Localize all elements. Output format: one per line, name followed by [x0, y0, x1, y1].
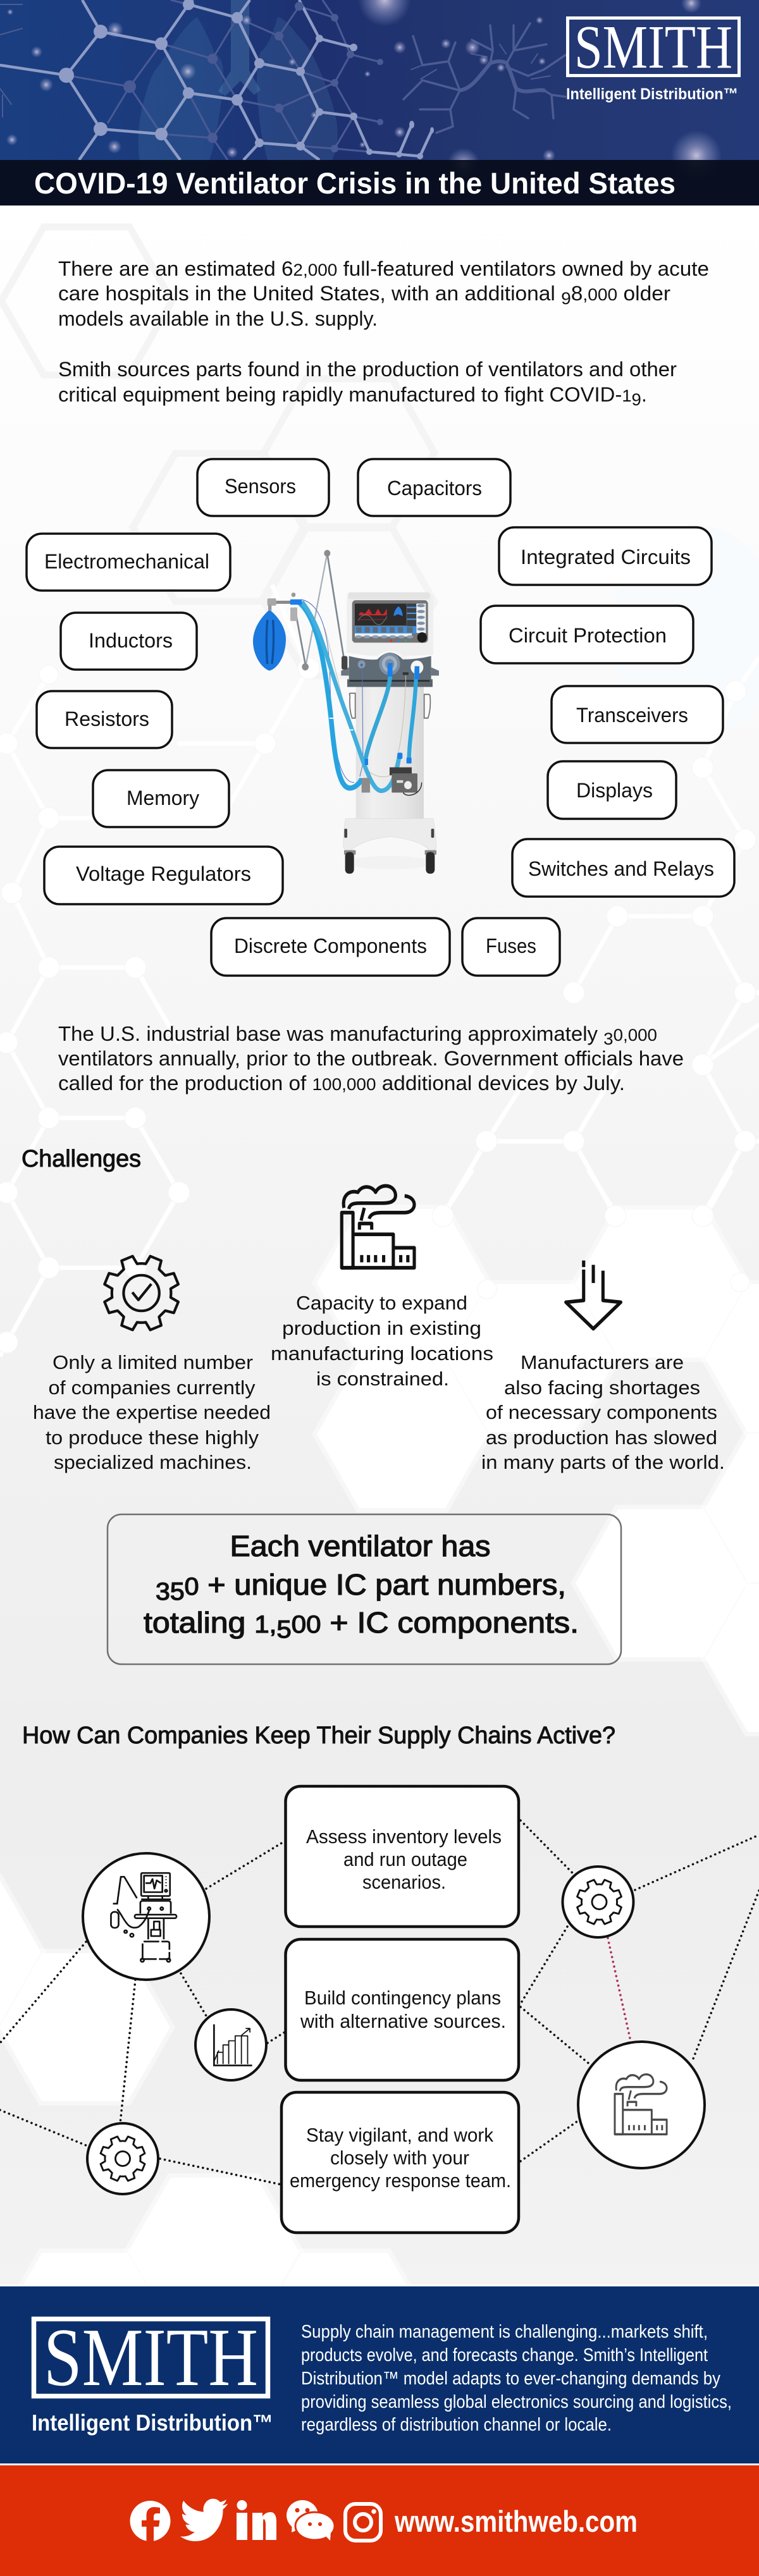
circle: chart icon	[195, 2009, 266, 2080]
footer logo: SMITH	[44, 2312, 258, 2403]
footer description	[301, 2322, 732, 2435]
label: Integrated Circuits	[499, 527, 712, 585]
hero neuron branch	[0, 4, 565, 133]
challenge 2	[271, 1186, 493, 1390]
heading: Challenges: Challenges	[22, 1146, 141, 1172]
label: Voltage Regulators: Voltage Regulators	[76, 862, 251, 885]
step: vigilance: closely with your	[330, 2147, 469, 2169]
title bar	[0, 160, 759, 205]
label: Inductors: Inductors	[89, 629, 173, 652]
white node network	[0, 585, 759, 1356]
callout: IC counts	[108, 1514, 621, 1664]
label: Fuses	[462, 918, 560, 976]
label: Inductors	[61, 613, 197, 670]
label: Memory: Memory	[126, 787, 199, 809]
icon: factory	[342, 1186, 414, 1268]
label: Resistors	[37, 691, 172, 748]
intro text: ,000 older	[583, 282, 668, 305]
footer: social band	[0, 2465, 759, 2576]
port panel	[349, 653, 431, 680]
callout: IC counts: + IC components.	[329, 1606, 558, 1639]
title: COVID-19 Ventilator Crisis in the United States	[34, 166, 676, 200]
icon: facebook	[130, 2501, 171, 2541]
challenge 1: specialized machines.	[54, 1451, 252, 1473]
production text: 3	[603, 1029, 614, 1048]
intro text: 8	[571, 282, 583, 305]
circle: factory icon	[578, 2042, 705, 2168]
callout: IC counts: + unique IC part numbers,	[207, 1568, 544, 1601]
humidifier	[390, 768, 412, 775]
label: Transceivers	[552, 686, 723, 743]
heading: supply chains: How Can Companies Keep Their Supply Chains Active?	[22, 1722, 615, 1749]
icon: down arrow	[566, 1261, 620, 1328]
connector	[268, 598, 276, 606]
production text: 0,000	[614, 1026, 657, 1045]
step: inventory: and run outage	[343, 1848, 467, 1870]
label: Displays	[548, 761, 676, 819]
challenge 3	[481, 1261, 725, 1473]
challenge 3: as production has slowed	[486, 1426, 717, 1449]
white honeycomb cells	[0, 1209, 759, 2401]
production text: ventilators annually, prior to the outbreak. Government officials have	[58, 1047, 684, 1070]
label: Voltage Regulators	[44, 847, 283, 904]
footer logo: Intelligent Distribution™	[32, 2410, 273, 2436]
footer description: products evolve, and forecasts change. Smith’s Intelligent	[301, 2345, 708, 2365]
icon: linkedin	[237, 2500, 276, 2540]
faint top hexagons	[1, 227, 435, 676]
challenge 2: is constrained.	[316, 1368, 449, 1390]
circle: right gear icon	[563, 1867, 634, 1937]
callout: IC counts: 5	[276, 1616, 292, 1643]
callout: IC counts: 35	[156, 1578, 185, 1605]
callout: IC counts: totaling 1,	[144, 1606, 275, 1639]
challenge 3: Manufacturers are	[521, 1351, 684, 1373]
Smith logo: Intelligent Distribution™	[566, 85, 738, 103]
label: Integrated Circuits: Integrated Circuits	[521, 546, 691, 568]
label: Fuses: Fuses	[486, 935, 536, 957]
callout: IC counts: 00	[292, 1611, 321, 1638]
label: Discrete Components	[211, 918, 450, 976]
footer logo	[32, 2312, 273, 2436]
hero molecular network	[0, 0, 434, 160]
bag	[253, 610, 286, 671]
label: Electromechanical: Electromechanical	[44, 550, 209, 573]
callout: IC counts: Each ventilator has	[230, 1530, 491, 1562]
website: www.smithweb.com	[394, 2505, 638, 2538]
hero bokeh dots	[6, 0, 722, 181]
challenge 2: manufacturing locations	[271, 1342, 493, 1365]
arm	[327, 553, 343, 657]
dotted connector network	[0, 1820, 759, 2185]
step: vigilance	[281, 2092, 519, 2233]
challenge 3: of necessary components	[486, 1401, 717, 1423]
label: Circuit Protection: Circuit Protection	[509, 624, 667, 647]
label: Sensors	[197, 459, 329, 516]
label: Switches and Relays: Switches and Relays	[528, 857, 714, 880]
challenge 2: production in existing	[282, 1317, 481, 1339]
intro text: 9	[632, 390, 641, 409]
base	[343, 819, 436, 851]
label: Circuit Protection	[481, 606, 693, 663]
label: Electromechanical	[27, 534, 230, 591]
label: Capacitors: Capacitors	[387, 477, 482, 500]
intro text: Smith sources parts found in the production of ventilators and other	[58, 358, 677, 381]
label: Switches and Relays	[512, 839, 734, 897]
label: Resistors: Resistors	[65, 708, 149, 730]
challenge 1: have the expertise needed	[33, 1401, 271, 1423]
challenge 1: to produce these highly	[46, 1426, 259, 1449]
hero banner	[0, 0, 759, 205]
challenge 1: of companies currently	[48, 1377, 256, 1399]
challenge 3: in many parts of the world.	[481, 1451, 725, 1473]
icon: gear with check	[104, 1256, 178, 1330]
callout: IC counts: 0	[185, 1573, 199, 1600]
icon: twitter	[180, 2499, 228, 2541]
label: Sensors: Sensors	[225, 475, 296, 498]
step: contingency: with alternative sources.	[300, 2010, 506, 2032]
step: vigilance: emergency response team.	[290, 2169, 511, 2192]
icon: instagram	[345, 2504, 381, 2541]
challenge 1: Only a limited number	[52, 1351, 253, 1373]
label: Capacitors	[358, 459, 510, 516]
label: Displays: Displays	[576, 779, 653, 802]
production text: called for the production of 100,000 additional devices by July.	[58, 1072, 625, 1095]
label: Memory	[93, 770, 229, 827]
icon: wechat	[287, 2500, 335, 2541]
intro text: models available in the U.S. supply.	[58, 307, 378, 330]
step: contingency: Build contingency plans	[304, 1987, 501, 2009]
step: contingency	[286, 1939, 519, 2080]
blue tubes	[299, 602, 417, 791]
intro text: 9	[561, 289, 571, 308]
intro text: care hospitals in the United States, with an additional	[58, 282, 533, 305]
circle: ventilator icon	[83, 1853, 209, 1980]
circle: left gear icon	[87, 2123, 158, 2194]
shadow and column	[348, 856, 432, 869]
step: vigilance: Stay vigilant, and work	[306, 2124, 493, 2146]
step: inventory: scenarios.	[362, 1871, 446, 1893]
production text	[58, 1022, 684, 1095]
label: Transceivers: Transceivers	[576, 704, 688, 727]
step: inventory: Assess inventory levels	[306, 1825, 502, 1848]
footer: company band	[0, 2286, 759, 2463]
intro text: .	[641, 383, 647, 406]
intro text: critical equipment being rapidly manufactured to fight COVID- 1	[58, 383, 631, 406]
challenge 1	[33, 1256, 271, 1473]
challenge 3: also facing shortages	[504, 1377, 700, 1399]
production text: The U.S. industrial base was manufacturing approximately	[58, 1022, 581, 1045]
Smith logo	[566, 13, 739, 103]
thin sample lines	[302, 599, 363, 782]
footer description: regardless of distribution channel or locale.	[301, 2415, 612, 2435]
footer description: Distribution™ model adapts to ever-changing demands by	[301, 2369, 720, 2389]
label: Discrete Components: Discrete Components	[234, 935, 427, 957]
step: inventory	[286, 1786, 519, 1927]
hero lungs	[139, 0, 338, 183]
intro text: There are an estimated 6 2,000 full-featured ventilators owned by acute	[58, 257, 709, 280]
footer description: Supply chain management is challenging...markets shift,	[301, 2322, 708, 2342]
component labels	[27, 459, 734, 976]
head unit	[347, 592, 433, 656]
ventilator illustration	[253, 550, 439, 874]
challenge 2: Capacity to expand	[296, 1292, 467, 1314]
intro text	[58, 257, 709, 409]
